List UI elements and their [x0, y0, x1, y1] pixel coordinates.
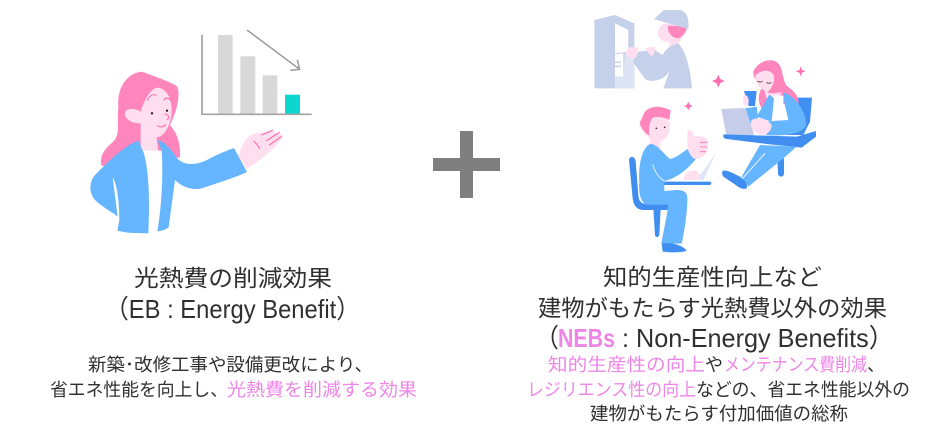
text block: NEBs description: 知的生産性の向上 — [548, 355, 705, 375]
icon: plus sign — [433, 131, 500, 198]
text block: EB description: 省エネ性能を向上し、 — [50, 380, 228, 400]
text block: EB description: 光熱費を削減する効果 — [227, 380, 417, 400]
text block: NEBs description: 建物がもたらす付加価値の総称 — [590, 404, 848, 424]
text block: EB description: 新築･改修工事や設備更改により、 — [88, 355, 373, 375]
woman figure — [90, 72, 283, 233]
heading: NEBs: 知的生産性向上など — [603, 264, 822, 290]
heading: NEBs — [535, 264, 894, 353]
text block: NEBs description — [527, 355, 910, 424]
text block: NEBs description: や — [705, 355, 723, 375]
sparkles — [684, 66, 806, 110]
text block: NEBs description: レジリエンス性の向上 — [527, 380, 696, 400]
text block: NEBs description: などの、省エネ性能以外の — [696, 380, 910, 400]
heading: NEBs: （ — [535, 323, 559, 353]
man seated giving thumbs up — [629, 107, 717, 252]
heading: NEBs: 建物がもたらす光熱費以外の効果 — [538, 295, 887, 321]
maintenance worker at cabinet — [594, 10, 692, 88]
illustration: woman presenting falling energy costs — [90, 30, 312, 233]
heading: EB: 光熱費の削減効果 — [134, 265, 332, 291]
woman seated with laptop and cup — [721, 60, 816, 189]
heading: EB: （EB : Energy Benefit） — [105, 294, 360, 324]
heading: EB — [105, 265, 360, 324]
illustration: maintenance worker and productive office workers — [594, 10, 816, 252]
text block: NEBs description: 、 — [867, 355, 885, 375]
heading: NEBs: : Non-Energy Benefits） — [622, 323, 894, 353]
bar chart: falling costs — [202, 30, 312, 114]
heading: NEBs: NEBs — [558, 323, 615, 353]
text block: EB description — [50, 355, 417, 400]
text block: NEBs description: メンテナンス費削減 — [724, 355, 867, 375]
